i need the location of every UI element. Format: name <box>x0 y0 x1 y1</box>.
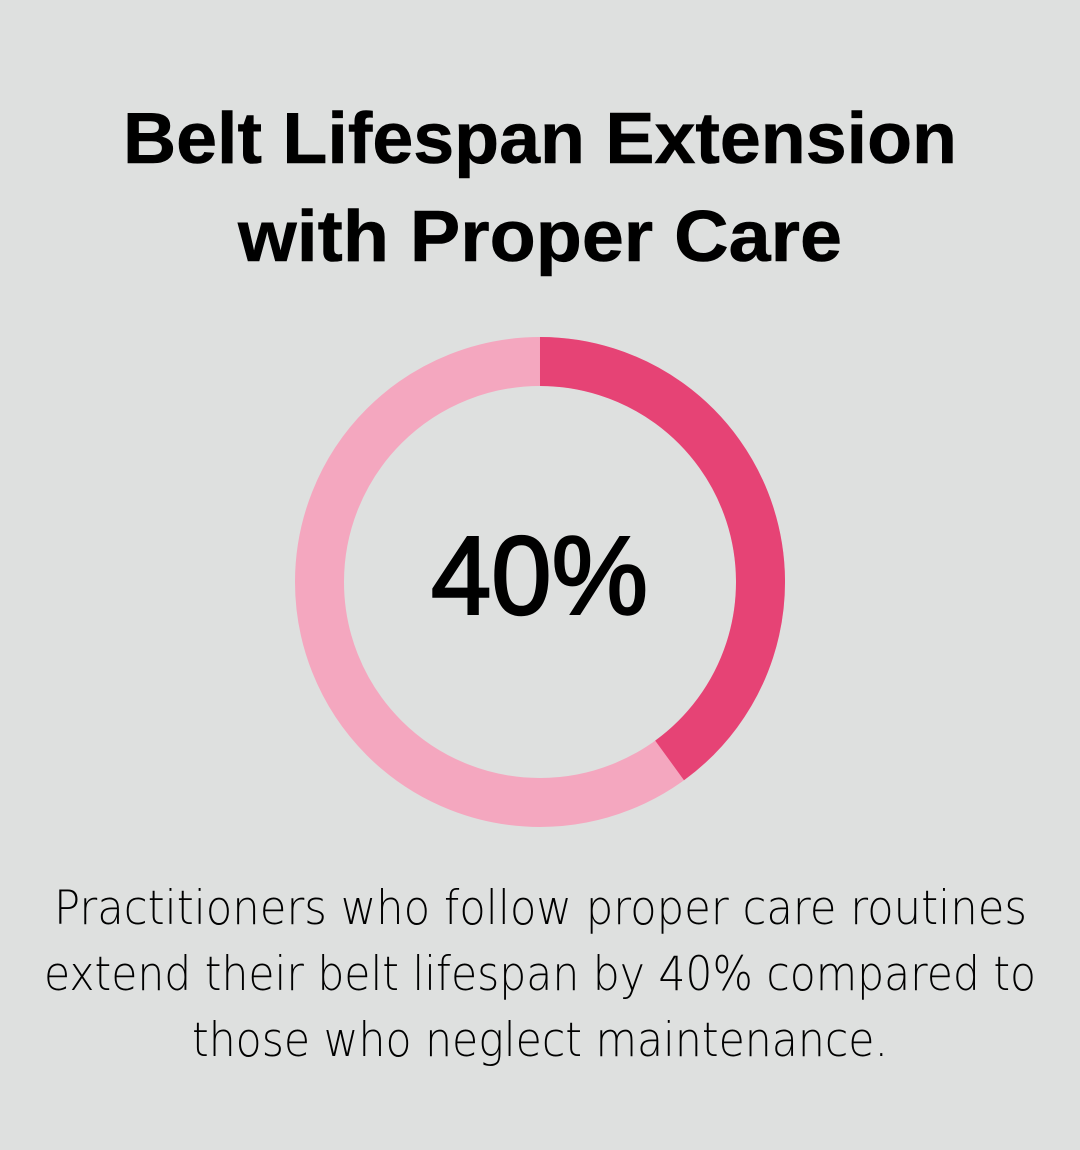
donut chart <box>320 362 761 802</box>
title <box>123 99 957 277</box>
description text: Practitioners who follow proper care routines <box>54 881 1027 936</box>
title: with Proper Care <box>237 197 842 277</box>
donut track: remaining 60% <box>320 362 760 802</box>
description text: those who neglect maintenance. <box>192 1013 888 1068</box>
donut segment: 40% <box>540 362 761 760</box>
title: Belt Lifespan Extension <box>123 99 957 179</box>
description text <box>44 881 1036 1068</box>
center value: 40% <box>431 514 648 638</box>
